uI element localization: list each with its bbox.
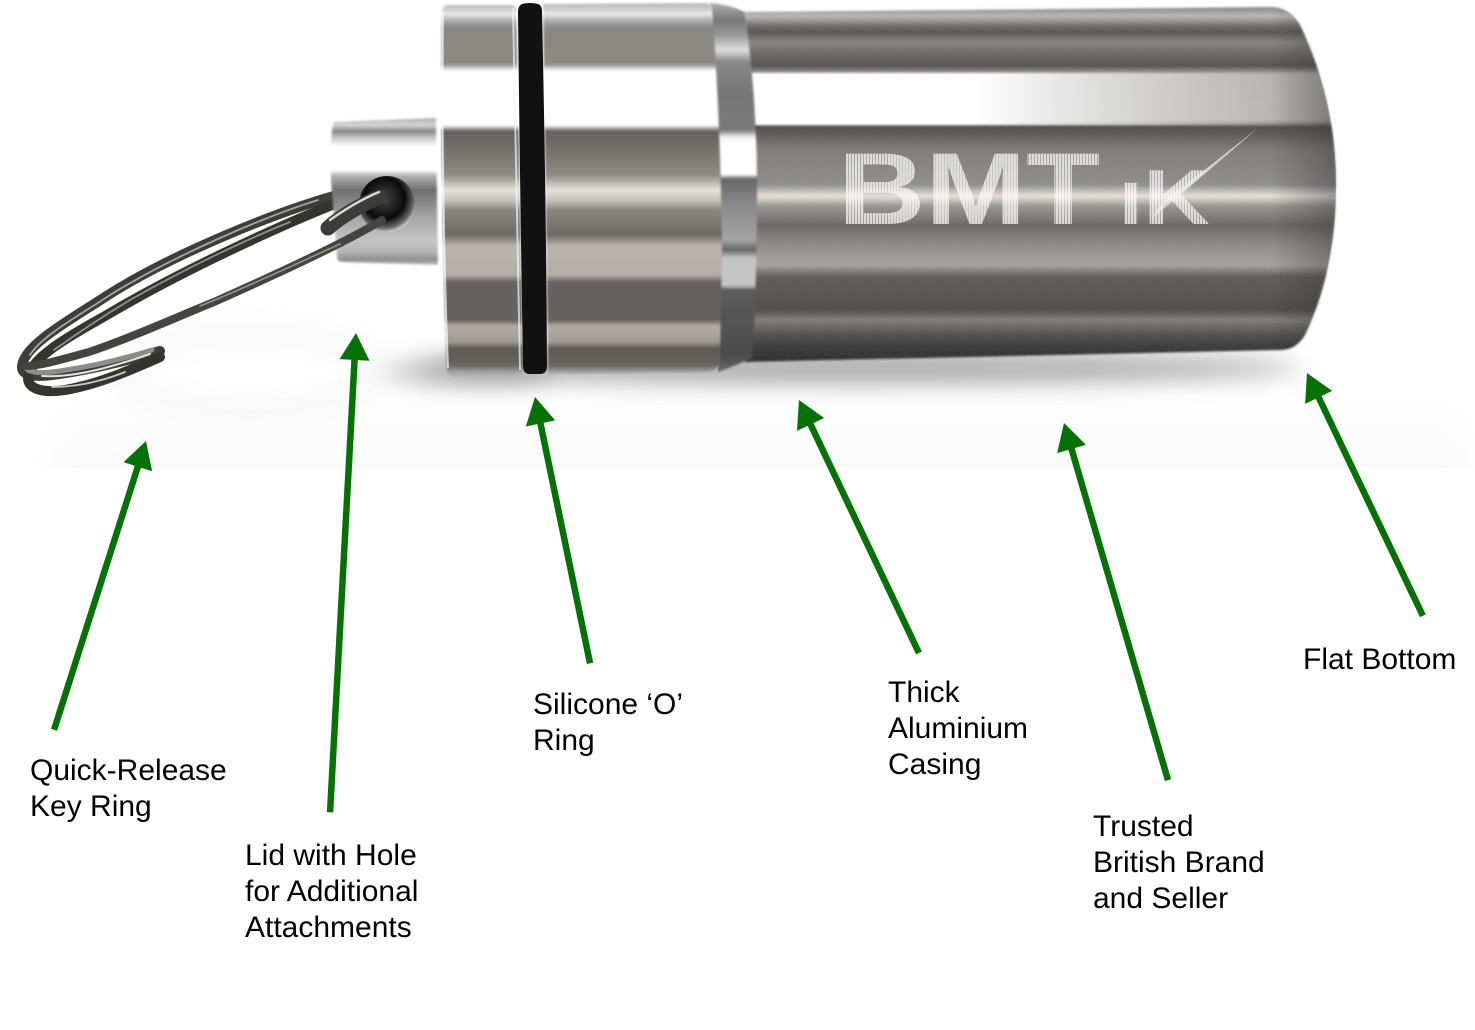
casing body	[745, 0, 1345, 365]
product: aluminium capsule	[331, 0, 1345, 376]
lid peg	[331, 118, 438, 265]
label: thick aluminium casing: Casing	[888, 748, 981, 781]
hole in lid	[359, 176, 415, 232]
label: trusted british brand: Trusted	[1093, 810, 1194, 843]
label: thick aluminium casing: Aluminium	[888, 712, 1028, 745]
arrow: silicone o-ring	[520, 394, 605, 666]
label: flat bottom: Flat Bottom	[1303, 643, 1456, 676]
collar	[543, 3, 722, 374]
label: silicone o-ring: Silicone ‘O’	[533, 688, 683, 721]
logo engraving: ıK	[1118, 153, 1210, 241]
logo engraving	[838, 128, 1258, 246]
label: silicone o-ring: Ring	[533, 724, 595, 757]
key ring: rear loop	[22, 193, 345, 391]
lid	[442, 5, 523, 376]
key ring: front strands through hole	[26, 176, 415, 366]
arrow: flat bottom	[1293, 367, 1436, 622]
shoulder taper	[710, 3, 757, 372]
label: thick aluminium casing: Thick	[888, 676, 961, 709]
label: lid with hole: Lid with Hole	[245, 839, 417, 872]
label: lid with hole: Attachments	[245, 911, 412, 944]
label: trusted british brand: British Brand	[1093, 846, 1265, 879]
label: trusted british brand: and Seller	[1093, 882, 1228, 915]
arrow: quick-release key ring	[40, 436, 160, 734]
floor shadow	[371, 344, 1300, 400]
label: quick-release key ring: Quick-Release	[30, 754, 227, 787]
logo engraving: BMT	[838, 132, 1100, 246]
arrow: trusted british brand	[1050, 419, 1182, 784]
silicone o-ring	[518, 3, 547, 374]
arrow: lid with hole	[315, 332, 371, 813]
label: lid with hole: for Additional	[245, 875, 418, 908]
label: quick-release key ring: Key Ring	[30, 790, 152, 823]
arrow: thick aluminium casing	[785, 394, 933, 659]
